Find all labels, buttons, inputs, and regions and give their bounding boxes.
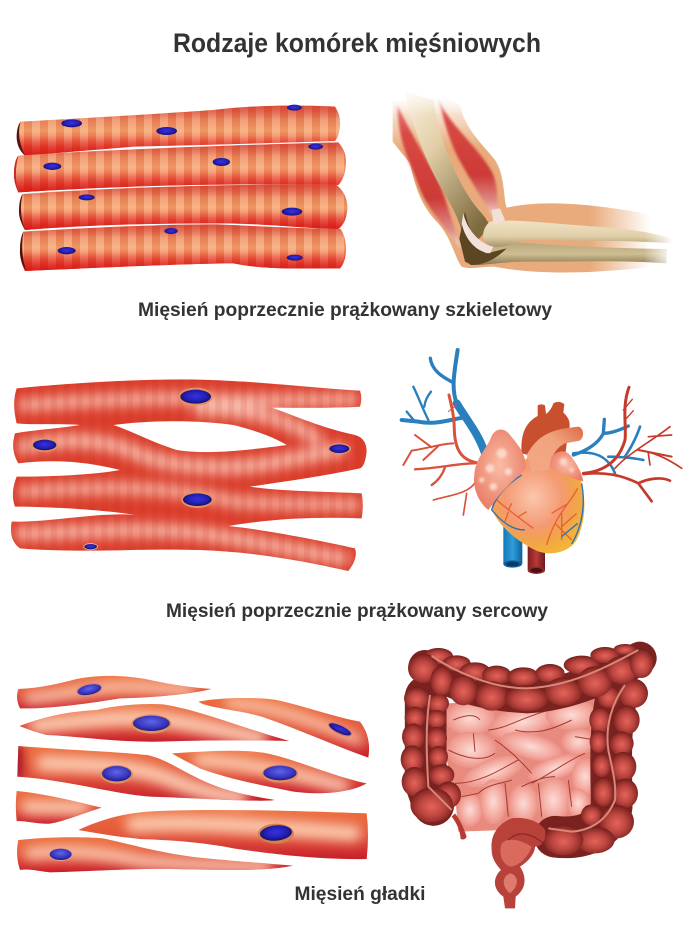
bone fade right (643, 225, 673, 268)
veins (402, 350, 643, 473)
fiber 2 (14, 142, 346, 192)
descending aorta (528, 537, 545, 574)
radius (483, 221, 672, 247)
top colon band (432, 650, 638, 688)
spindle cells (16, 676, 369, 872)
smooth muscle nuclei (49, 680, 354, 861)
cardiac nuclei (31, 388, 351, 550)
heart body (492, 457, 584, 553)
skin fade right (590, 198, 650, 278)
panel: skeletal muscle fibers (14, 105, 347, 271)
elbow shadow (459, 212, 507, 265)
skin fade top (390, 95, 480, 148)
colon back row (424, 644, 636, 686)
nuclei (43, 105, 323, 261)
network of branching fibers (10, 379, 367, 571)
longitudinal bands (427, 685, 625, 832)
panel: intestine illustration (401, 644, 654, 908)
left atrium (550, 451, 583, 482)
triceps muscle (397, 105, 462, 248)
skin (393, 98, 657, 272)
rectum (491, 818, 545, 908)
aortic arch (527, 427, 583, 472)
right atrium (474, 430, 526, 510)
colon left side (401, 687, 461, 822)
tendon (492, 208, 505, 225)
caption: skeletal: Mięsień poprzecznie prążkowany szkieletowy (138, 300, 552, 321)
biceps muscle (438, 98, 498, 217)
colon front row (408, 649, 654, 711)
colon underlay (425, 658, 640, 837)
back aorta (521, 402, 570, 457)
right arteries (583, 387, 682, 501)
panel: cardiac muscle fibers (10, 379, 367, 571)
small intestine (445, 697, 598, 832)
panel: smooth muscle cells (16, 676, 369, 872)
colon right side (543, 679, 648, 855)
caption: smooth: Mięsień gładki (294, 884, 426, 905)
caption: cardiac: Mięsień poprzecznie prążkowany sercowy (166, 601, 548, 622)
panel: heart illustration (402, 350, 682, 574)
panel: elbow illustration (390, 85, 673, 278)
fiber 3 (19, 185, 347, 230)
cartilage (462, 213, 493, 253)
fiber 4 (20, 224, 346, 271)
coronary vessels (497, 488, 578, 545)
left arteries (403, 395, 477, 515)
ulna (467, 243, 667, 265)
fiber 1 (17, 106, 340, 156)
appendix (452, 813, 467, 839)
humerus (405, 92, 490, 245)
vena cava (503, 520, 522, 568)
title: Rodzaje komórek mięśniowych (173, 28, 541, 58)
fade top (390, 85, 477, 115)
